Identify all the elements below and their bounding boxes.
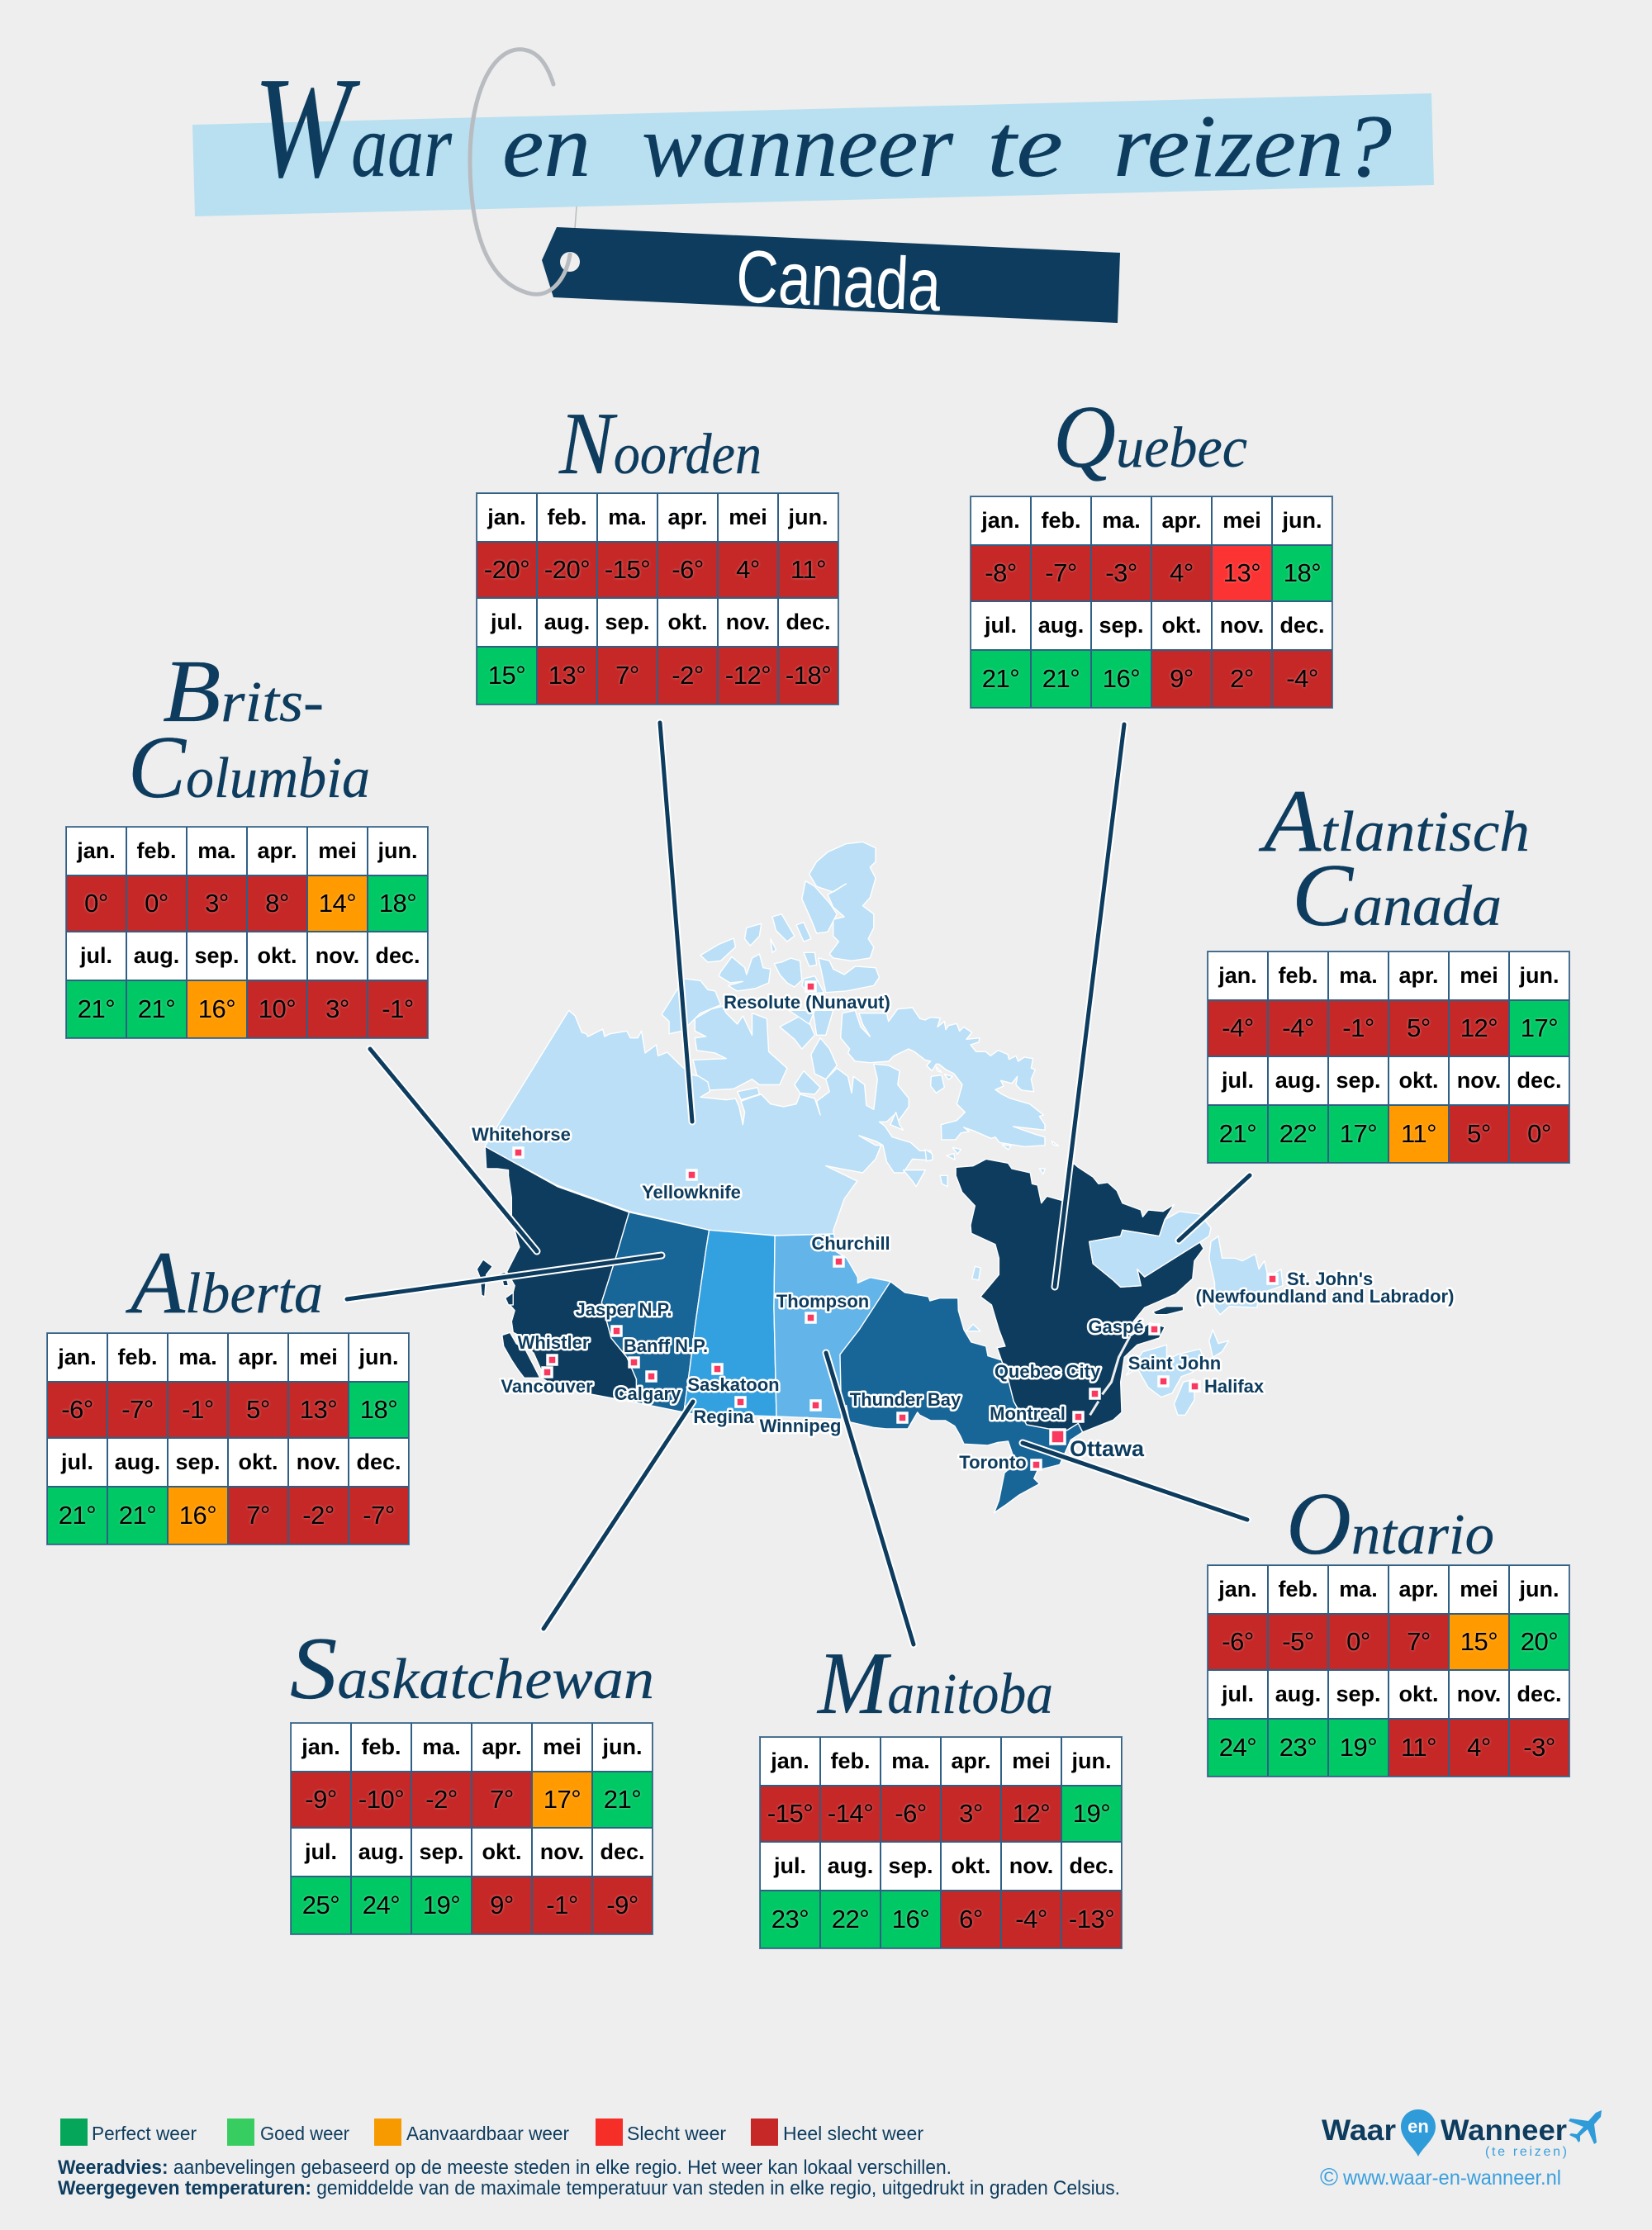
table: Saskatchewan: nov.	[540, 1839, 584, 1864]
table: Noorden: -2°	[672, 661, 704, 690]
table: Noorden: aug.	[544, 610, 590, 634]
table: Quebec: 9°	[1170, 664, 1194, 693]
panel: Brits-Columbia	[65, 643, 429, 1039]
table: Saskatchewan: ma.	[422, 1734, 461, 1759]
table: Brits-Columbia: okt.	[257, 943, 297, 968]
legend: Slecht weer	[627, 2123, 726, 2144]
table: Atlantisch Canada: 11°	[1401, 1119, 1436, 1148]
table: Manitoba: 23°	[771, 1905, 809, 1933]
table: Manitoba: sep.	[888, 1853, 933, 1878]
table: Brits-Columbia: nov.	[316, 943, 359, 968]
table: Quebec: -7°	[1045, 558, 1077, 587]
city markers and labels: Saint John	[1128, 1353, 1221, 1374]
legend: Perfect weer	[92, 2123, 197, 2144]
region: Atlantisch Canada	[972, 1169, 1283, 1415]
region: Saskatchewan	[684, 1230, 776, 1416]
table: Quebec: jan.	[981, 508, 1020, 533]
table: Ontario: 24°	[1219, 1733, 1256, 1762]
table: Brits-Columbia: aug.	[134, 943, 179, 968]
table: Manitoba: 3°	[959, 1799, 983, 1828]
table: Alberta: -2°	[302, 1501, 335, 1530]
table: Saskatchewan: 19°	[423, 1891, 460, 1919]
table: Ontario	[1208, 1565, 1569, 1777]
table: Manitoba: dec.	[1069, 1853, 1114, 1878]
tag ring	[470, 50, 570, 294]
region: Manitoba	[774, 1234, 891, 1419]
table: Quebec: -4°	[1286, 664, 1318, 693]
table: Noorden: jan.	[487, 505, 526, 529]
logo: en	[1408, 2116, 1429, 2137]
heading: Saskatchewan: Saskatchewan	[290, 1620, 654, 1718]
title	[254, 47, 1392, 207]
table: Brits-Columbia: 0°	[84, 889, 108, 918]
heading: Brits-Columbia: Brits-	[163, 643, 324, 741]
table: Saskatchewan: okt.	[482, 1839, 522, 1864]
table: Atlantisch Canada: mei	[1460, 963, 1498, 988]
city markers and labels: Toronto	[959, 1452, 1027, 1473]
table: Noorden: ma.	[608, 505, 647, 529]
logo	[1320, 2109, 1602, 2191]
table: Ontario: 4°	[1467, 1733, 1491, 1762]
table: Quebec: jul.	[985, 613, 1017, 638]
region: Baffin Island	[841, 1008, 1059, 1161]
table: Brits-Columbia: ma.	[197, 838, 236, 863]
table: Alberta	[47, 1333, 409, 1544]
notes	[58, 2156, 1120, 2199]
table: Atlantisch Canada: jul.	[1222, 1068, 1254, 1093]
table: Quebec: nov.	[1220, 613, 1264, 638]
table: Alberta: mei	[299, 1345, 338, 1369]
table: Noorden: -12°	[725, 661, 771, 690]
table: Quebec: 2°	[1230, 664, 1254, 693]
table: Atlantisch Canada: 22°	[1279, 1119, 1317, 1148]
table: Saskatchewan: 24°	[363, 1891, 400, 1919]
legend: Aanvaardbaar weer	[406, 2123, 569, 2144]
table: Ontario: 0°	[1346, 1627, 1370, 1656]
table: Alberta: 18°	[360, 1395, 397, 1424]
table: Ontario: -3°	[1523, 1733, 1555, 1762]
heading: Noorden: Noorden	[558, 395, 762, 493]
table: Manitoba: -15°	[767, 1799, 813, 1828]
legend: Goed weer	[260, 2123, 349, 2144]
table: Alberta: -1°	[182, 1395, 214, 1424]
table: Saskatchewan: 21°	[604, 1785, 641, 1814]
table: Atlantisch Canada: 5°	[1407, 1013, 1431, 1042]
table: Brits-Columbia: feb.	[136, 838, 177, 863]
table: Quebec: -8°	[985, 558, 1017, 587]
table: Manitoba: jul.	[774, 1853, 806, 1878]
table: Manitoba: mei	[1012, 1748, 1051, 1773]
table: Atlantisch Canada: jun.	[1520, 963, 1559, 988]
table: Saskatchewan: -10°	[358, 1785, 404, 1814]
title: te	[987, 97, 1063, 196]
table: Brits-Columbia: sep.	[194, 943, 240, 968]
table: Brits-Columbia: apr.	[257, 838, 297, 863]
table: Brits-Columbia	[66, 827, 428, 1038]
table: Ontario: 7°	[1407, 1627, 1431, 1656]
table: Alberta: aug.	[115, 1450, 160, 1474]
notes: Weeradvies: aanbevelingen gebaseerd op de meeste steden in elke regio. Het weer kan lokaal verschillen.	[58, 2156, 952, 2179]
table: Atlantisch Canada: -4°	[1222, 1013, 1254, 1042]
table: Noorden: okt.	[667, 610, 707, 634]
table: Noorden: 11°	[790, 555, 826, 584]
title: Waar	[254, 47, 453, 207]
table: Alberta: 7°	[246, 1501, 270, 1530]
table: Atlantisch Canada: -1°	[1342, 1013, 1374, 1042]
table: Atlantisch Canada: feb.	[1278, 963, 1318, 988]
table: Saskatchewan: dec.	[600, 1839, 645, 1864]
table: Alberta: apr.	[238, 1345, 278, 1369]
region: Ontario	[840, 1282, 1083, 1513]
table: Manitoba: okt.	[951, 1853, 991, 1878]
table: Ontario: dec.	[1517, 1682, 1562, 1706]
city markers and labels: Halifax	[1204, 1376, 1265, 1397]
table: Brits-Columbia: 8°	[265, 889, 289, 918]
tag string	[575, 206, 577, 229]
table: Saskatchewan: -2°	[425, 1785, 458, 1814]
city markers and labels: Regina	[693, 1407, 754, 1427]
table: Ontario: jun.	[1520, 1577, 1559, 1601]
table: Saskatchewan: -9°	[305, 1785, 337, 1814]
table: Quebec: 13°	[1223, 558, 1260, 587]
title: reizen?	[1113, 97, 1392, 196]
table: Brits-Columbia: 10°	[259, 994, 296, 1023]
table: Noorden: dec.	[786, 610, 831, 634]
table: Ontario: 15°	[1460, 1627, 1498, 1656]
table: Atlantisch Canada: 17°	[1521, 1013, 1558, 1042]
table: Alberta: feb.	[117, 1345, 157, 1369]
table: Atlantisch Canada: dec.	[1517, 1068, 1562, 1093]
table: Atlantisch Canada: aug.	[1275, 1068, 1321, 1093]
heading: Alberta: Alberta	[126, 1234, 323, 1332]
city markers and labels: Saskatoon	[687, 1374, 780, 1395]
table: Quebec: jun.	[1282, 508, 1322, 533]
table: Saskatchewan: 25°	[302, 1891, 339, 1919]
table: Atlantisch Canada: apr.	[1398, 963, 1439, 988]
table: Saskatchewan: 17°	[544, 1785, 581, 1814]
table: Quebec: apr.	[1161, 508, 1202, 533]
table: Alberta: nov.	[297, 1450, 340, 1474]
panel: Manitoba	[759, 1635, 1123, 1949]
city markers and labels: St. John's	[1287, 1269, 1373, 1289]
table: Atlantisch Canada: 5°	[1467, 1119, 1491, 1148]
heading: Atlantisch Canada	[1259, 772, 1530, 945]
table: Ontario: 11°	[1401, 1733, 1436, 1762]
table: Ontario: jan.	[1218, 1577, 1257, 1601]
table: Alberta: -7°	[363, 1501, 395, 1530]
legend: Heel slecht weer	[783, 2123, 923, 2144]
table: Atlantisch Canada: jan.	[1218, 963, 1257, 988]
table: Quebec: 16°	[1103, 664, 1140, 693]
table: Manitoba: 22°	[832, 1905, 869, 1933]
table: Noorden: 7°	[615, 661, 639, 690]
table: Ontario: aug.	[1275, 1682, 1321, 1706]
table: Noorden: jul.	[491, 610, 523, 634]
table: Ontario: apr.	[1398, 1577, 1439, 1601]
city markers and labels: Whistler	[518, 1332, 590, 1353]
table: Alberta: -6°	[61, 1395, 93, 1424]
city markers and labels: Gaspé	[1088, 1317, 1144, 1337]
table: Manitoba: -6°	[895, 1799, 927, 1828]
table: Manitoba: jan.	[771, 1748, 809, 1773]
table: Alberta: jan.	[58, 1345, 97, 1369]
table: Alberta: 21°	[119, 1501, 156, 1530]
table: Alberta: okt.	[238, 1450, 278, 1474]
price tag: Canada: Canada	[734, 235, 943, 327]
table: Alberta: 21°	[59, 1501, 96, 1530]
table: Atlantisch Canada: okt.	[1398, 1068, 1439, 1093]
legend	[60, 2118, 923, 2146]
table: Noorden: feb.	[547, 505, 586, 529]
region: Brits-Columbia	[477, 1146, 636, 1402]
table: Ontario: sep.	[1336, 1682, 1381, 1706]
table: Manitoba: 12°	[1013, 1799, 1050, 1828]
table: Alberta: 13°	[300, 1395, 337, 1424]
region: Alberta	[601, 1212, 710, 1412]
logo: (te reizen)	[1485, 2145, 1567, 2159]
city markers and labels	[472, 982, 1454, 1473]
table: Manitoba: 6°	[959, 1905, 983, 1933]
table: Brits-Columbia: 21°	[78, 994, 115, 1023]
table: Ontario: feb.	[1278, 1577, 1318, 1601]
table: Atlantisch Canada: 12°	[1460, 1013, 1498, 1042]
table: Noorden: nov.	[726, 610, 770, 634]
city markers and labels: Ottawa	[1070, 1436, 1145, 1461]
table: Brits-Columbia: 18°	[379, 889, 416, 918]
region: Noorden	[485, 842, 1059, 1236]
logo: ©	[1320, 2164, 1338, 2191]
table: Quebec: aug.	[1038, 613, 1084, 638]
table: Atlantisch Canada: 0°	[1527, 1119, 1551, 1148]
table: Manitoba: nov.	[1009, 1853, 1053, 1878]
table: Alberta: sep.	[175, 1450, 221, 1474]
table: Noorden: -20°	[544, 555, 590, 584]
table: Ontario: okt.	[1398, 1682, 1439, 1706]
table: Brits-Columbia: mei	[318, 838, 357, 863]
table: Saskatchewan: aug.	[358, 1839, 404, 1864]
table: Quebec: 21°	[982, 664, 1019, 693]
table: Brits-Columbia: -1°	[382, 994, 414, 1023]
table: Brits-Columbia: 16°	[198, 994, 235, 1023]
heading: Brits-Columbia: Columbia	[128, 719, 370, 817]
table: Noorden: 4°	[736, 555, 760, 584]
table: Atlantisch Canada: -4°	[1282, 1013, 1314, 1042]
table: Saskatchewan: sep.	[419, 1839, 464, 1864]
table: Quebec: 18°	[1284, 558, 1321, 587]
title: en	[502, 97, 591, 196]
panel: Saskatchewan	[290, 1620, 654, 1935]
table: Quebec: -3°	[1105, 558, 1137, 587]
heading: Ontario: Ontario	[1286, 1475, 1494, 1573]
city markers and labels: Yellowknife	[642, 1182, 741, 1203]
table: Atlantisch Canada: sep.	[1336, 1068, 1381, 1093]
table: Ontario: jul.	[1222, 1682, 1254, 1706]
table: Quebec: 4°	[1170, 558, 1194, 587]
city markers and labels: Quebec City	[995, 1361, 1101, 1382]
city markers and labels: Thunder Bay	[850, 1389, 961, 1410]
table: Noorden: 15°	[488, 661, 525, 690]
table: Noorden: 13°	[548, 661, 586, 690]
heading: Quebec: Quebec	[1053, 388, 1247, 486]
table: Manitoba: -4°	[1015, 1905, 1047, 1933]
city markers and labels: Banff N.P.	[624, 1336, 708, 1356]
heading: Brits-Columbia	[128, 643, 370, 817]
table: Alberta: dec.	[356, 1450, 401, 1474]
city markers and labels: Winnipeg	[760, 1416, 841, 1436]
city markers and labels: Vancouver	[501, 1376, 593, 1397]
city markers and labels: Montreal	[990, 1403, 1066, 1424]
panel: Noorden	[476, 395, 839, 705]
table: Manitoba: feb.	[830, 1748, 871, 1773]
city markers and labels: (Newfoundland and Labrador)	[1196, 1286, 1454, 1307]
table: Brits-Columbia: jul.	[80, 943, 112, 968]
table: Ontario: -5°	[1282, 1627, 1314, 1656]
table: Brits-Columbia: 0°	[145, 889, 169, 918]
panel: Quebec	[970, 388, 1333, 709]
title band	[192, 93, 1434, 216]
city markers and labels: Churchill	[811, 1233, 890, 1254]
panel: Ontario	[1207, 1475, 1570, 1777]
table: Saskatchewan: mei	[543, 1734, 582, 1759]
title: wanneer	[642, 97, 954, 196]
table: Noorden	[477, 493, 838, 705]
table: Brits-Columbia: 3°	[205, 889, 229, 918]
table: Manitoba: aug.	[828, 1853, 873, 1878]
table: Quebec: dec.	[1279, 613, 1325, 638]
heading: Atlantisch Canada: Atlantisch	[1259, 772, 1530, 871]
logo: Waar	[1322, 2114, 1396, 2147]
table: Quebec: sep.	[1099, 613, 1144, 638]
table: Manitoba: 19°	[1073, 1799, 1110, 1828]
table: Noorden: jun.	[788, 505, 828, 529]
table: Quebec: okt.	[1161, 613, 1201, 638]
table: Noorden: -18°	[786, 661, 831, 690]
table: Alberta: ma.	[178, 1345, 217, 1369]
table: Quebec: 21°	[1042, 664, 1080, 693]
city markers and labels: Calgary	[615, 1383, 681, 1404]
table: Noorden: -6°	[672, 555, 704, 584]
table: Alberta: -7°	[121, 1395, 154, 1424]
table: Saskatchewan: feb.	[361, 1734, 401, 1759]
table: Atlantisch Canada: nov.	[1457, 1068, 1501, 1093]
table: Ontario: 19°	[1340, 1733, 1377, 1762]
table: Noorden: mei	[729, 505, 767, 529]
table: Saskatchewan: 9°	[490, 1891, 514, 1919]
table: Ontario: mei	[1460, 1577, 1498, 1601]
price tag: Canada	[542, 227, 1120, 327]
table: Atlantisch Canada: ma.	[1339, 963, 1378, 988]
city markers and labels: Thompson	[776, 1291, 869, 1312]
table: Alberta: 16°	[179, 1501, 216, 1530]
table: Manitoba	[760, 1737, 1122, 1948]
table: Brits-Columbia: dec.	[375, 943, 420, 968]
table: Manitoba: jun.	[1072, 1748, 1112, 1773]
leader lines	[347, 723, 1250, 1644]
table: Noorden: apr.	[667, 505, 708, 529]
table: Brits-Columbia: 14°	[319, 889, 356, 918]
table: Alberta: 5°	[246, 1395, 270, 1424]
map of Canada	[477, 842, 1283, 1513]
table: Manitoba: apr.	[951, 1748, 991, 1773]
table: Brits-Columbia: jan.	[77, 838, 116, 863]
table: Alberta: jun.	[358, 1345, 398, 1369]
table: Saskatchewan: jul.	[305, 1839, 337, 1864]
table: Saskatchewan: 7°	[490, 1785, 514, 1814]
table: Manitoba: -13°	[1069, 1905, 1114, 1933]
table: Ontario: 23°	[1279, 1733, 1317, 1762]
table: Noorden: -15°	[605, 555, 650, 584]
table: Noorden: -20°	[484, 555, 529, 584]
logo: www.waar-en-wanneer.nl	[1342, 2166, 1561, 2190]
table: Saskatchewan	[291, 1723, 653, 1934]
notes: Weergegeven temperaturen: gemiddelde van de maximale temperatuur van steden in elke regio, uitgedrukt in graden Celsius.	[58, 2177, 1120, 2199]
table: Saskatchewan: apr.	[482, 1734, 522, 1759]
table: Quebec: feb.	[1041, 508, 1080, 533]
table: Ontario: ma.	[1339, 1577, 1378, 1601]
table: Ontario: -6°	[1222, 1627, 1254, 1656]
table: Ontario: nov.	[1457, 1682, 1501, 1706]
table: Saskatchewan: -9°	[606, 1891, 638, 1919]
table: Saskatchewan: jan.	[301, 1734, 340, 1759]
table: Brits-Columbia: jun.	[378, 838, 418, 863]
table: Atlantisch Canada: 21°	[1219, 1119, 1256, 1148]
table: Alberta: jul.	[61, 1450, 93, 1474]
table: Atlantisch Canada	[1208, 951, 1569, 1163]
table: Saskatchewan: -1°	[546, 1891, 578, 1919]
city markers and labels: Resolute (Nunavut)	[724, 992, 890, 1013]
table: Quebec	[971, 496, 1332, 708]
table: Atlantisch Canada: 17°	[1340, 1119, 1377, 1148]
region: Quebec	[956, 1159, 1203, 1432]
table: Noorden: sep.	[605, 610, 650, 634]
city markers and labels: Whitehorse	[472, 1124, 571, 1145]
table: Manitoba: -14°	[828, 1799, 873, 1828]
table: Saskatchewan: jun.	[603, 1734, 643, 1759]
table: Brits-Columbia: 21°	[138, 994, 175, 1023]
heading: Atlantisch Canada: Canada	[1292, 847, 1502, 945]
table: Quebec: ma.	[1102, 508, 1141, 533]
table: Manitoba: 16°	[892, 1905, 929, 1933]
table: Ontario: 20°	[1521, 1627, 1558, 1656]
table: Quebec: mei	[1222, 508, 1261, 533]
table: Brits-Columbia: 3°	[325, 994, 349, 1023]
heading: Manitoba: Manitoba	[816, 1635, 1053, 1733]
logo: Wanneer	[1441, 2114, 1567, 2147]
panel: Atlantisch Canada	[1207, 772, 1570, 1164]
table: Manitoba: ma.	[891, 1748, 930, 1773]
city markers and labels: Jasper N.P.	[575, 1299, 672, 1320]
panel: Alberta	[46, 1234, 410, 1545]
